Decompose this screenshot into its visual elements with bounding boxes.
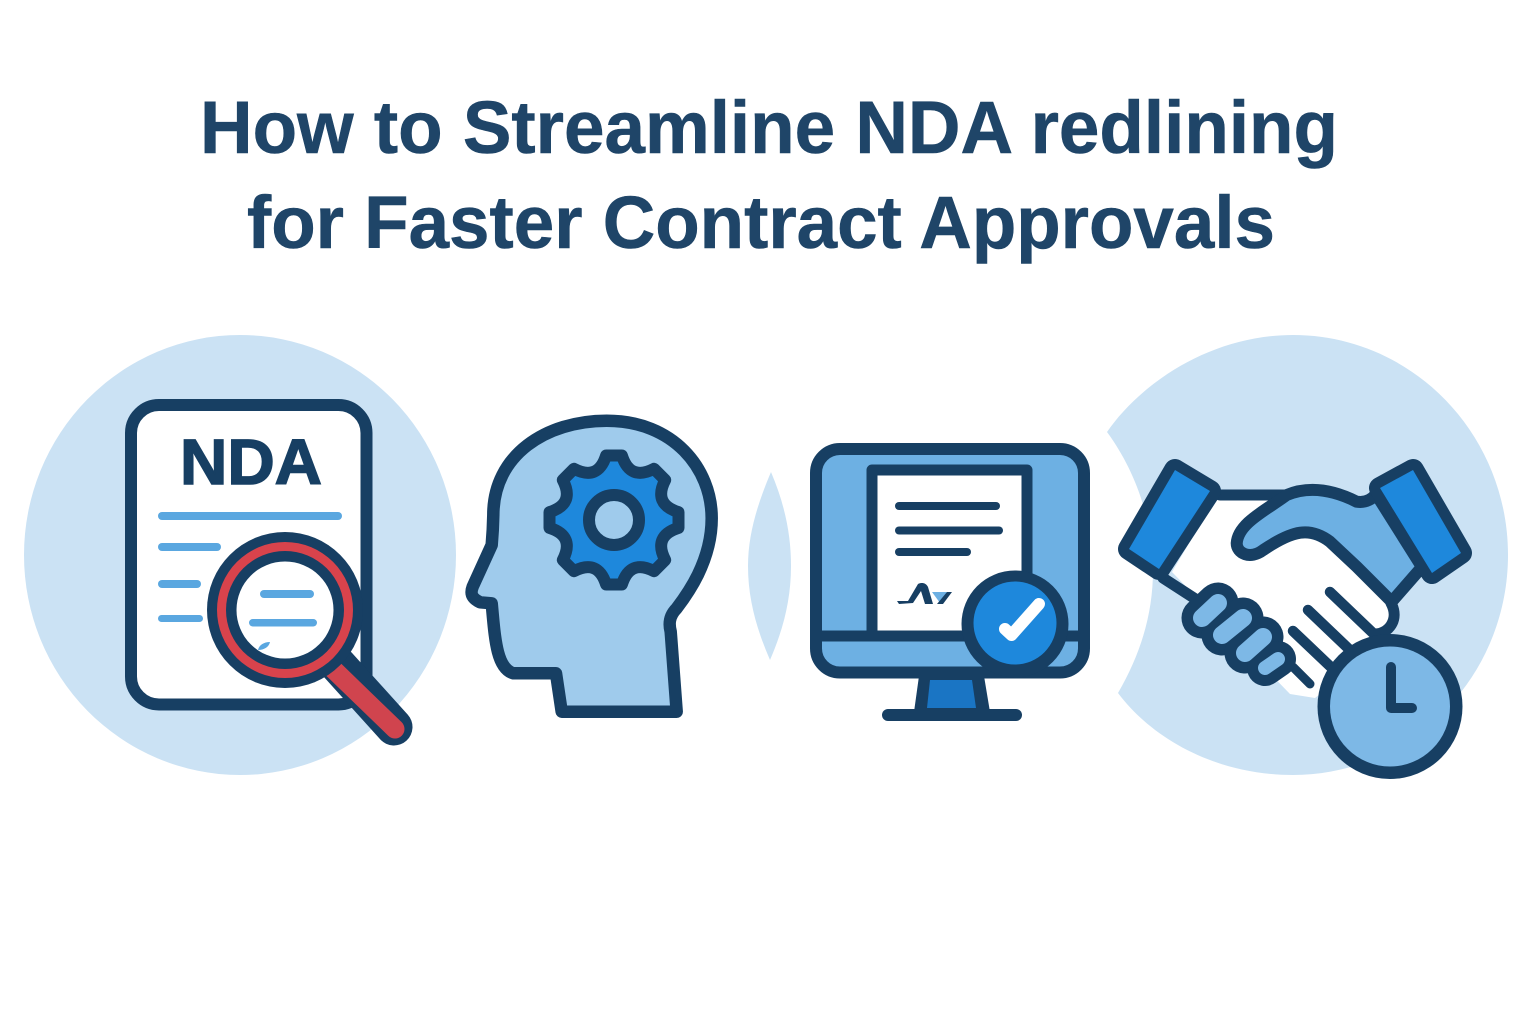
title: How to Streamline NDA redlining xyxy=(200,86,1338,169)
icon: head with gear xyxy=(472,421,712,712)
monitor base xyxy=(888,709,1016,721)
clock xyxy=(1318,634,1462,779)
check badge xyxy=(962,570,1068,678)
finger lines xyxy=(1293,592,1375,684)
background circle: right, cut on its left side xyxy=(1107,335,1508,775)
icon: monitor with signed document xyxy=(815,449,1085,715)
head silhouette xyxy=(472,421,712,712)
icon: handshake with clock xyxy=(1129,470,1462,779)
on-screen document xyxy=(872,470,1027,636)
gripping fingers xyxy=(1202,603,1278,668)
document lines xyxy=(899,506,999,552)
title: for Faster Contract Approvals xyxy=(247,181,1275,264)
document text lines xyxy=(158,512,342,622)
screen divider xyxy=(815,630,1085,642)
monitor stand xyxy=(914,676,990,712)
magnifier lens xyxy=(207,532,363,688)
title xyxy=(200,86,1338,264)
wrist outlines xyxy=(1163,495,1394,634)
background circle: left xyxy=(24,335,456,775)
document page xyxy=(131,405,366,704)
gear xyxy=(550,456,678,584)
white palm area xyxy=(1172,496,1393,698)
NDA label: NDA xyxy=(180,426,322,498)
magnifier handle xyxy=(333,665,395,729)
right hand xyxy=(1237,490,1422,602)
right cuff xyxy=(1380,470,1461,573)
stand highlight xyxy=(927,680,976,708)
icon: NDA document with magnifier xyxy=(131,405,395,729)
signature xyxy=(897,583,952,604)
left cuff xyxy=(1129,470,1210,569)
monitor screen xyxy=(816,449,1084,672)
background lens fragment: middle xyxy=(748,472,791,660)
